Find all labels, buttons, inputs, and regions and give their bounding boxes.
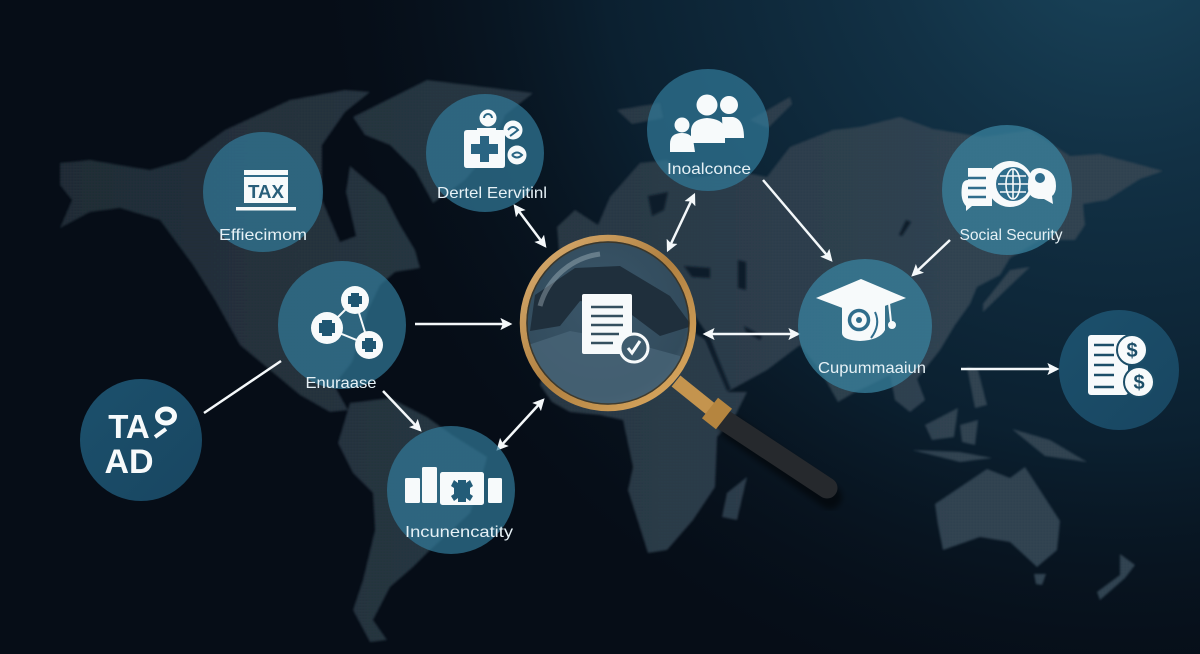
node: Enuraase network bbox=[278, 261, 406, 392]
label: Cupummaaiun bbox=[818, 360, 926, 377]
arrow: Social Security to Cupummaaiun bbox=[913, 240, 950, 275]
icon: document with dollar coins: $ bbox=[1126, 340, 1138, 362]
line: TA AD to Enuraase bbox=[204, 361, 281, 413]
node: dental services bbox=[426, 94, 547, 212]
arrow: Inoalconce to Cupummaaiun bbox=[763, 180, 831, 260]
node: Inoalconce people bbox=[647, 69, 769, 191]
arrow: lens and Cupummaaiun bbox=[705, 333, 798, 335]
icon: medical kit bbox=[464, 110, 526, 168]
icon: people group bbox=[670, 94, 744, 152]
icon: tax calendar: TAX bbox=[248, 182, 284, 202]
label: Social Security bbox=[960, 227, 1062, 244]
icon: TA AD lettering: TA bbox=[108, 408, 150, 445]
world map bbox=[60, 80, 1163, 642]
node: Efficiency tax bbox=[203, 132, 323, 252]
arrow: Dertel Eervitinl and lens bbox=[515, 206, 545, 246]
node: Social Security bbox=[942, 125, 1072, 255]
arrow: Enuraase to lens bbox=[415, 323, 510, 325]
icon: speech bubbles and globe bbox=[962, 161, 1056, 211]
icon: linked medical nodes bbox=[311, 286, 383, 359]
label: Incunencatity bbox=[405, 524, 513, 541]
node: TA AD bbox=[80, 379, 202, 501]
icon: TA AD lettering bbox=[104, 408, 174, 481]
icon: document with dollar coins: $ bbox=[1133, 372, 1145, 394]
node: Incunencatity bbox=[387, 426, 515, 554]
arrow: Enuraase to Incunencatity bbox=[383, 391, 420, 430]
label: Effiecimom bbox=[219, 227, 307, 244]
icon: graduation cap bbox=[816, 279, 906, 341]
node: finance document bbox=[1059, 310, 1179, 430]
icon: document with check bbox=[582, 294, 648, 362]
lens bbox=[523, 238, 693, 408]
arrow: lens and Inoalconce bbox=[668, 195, 694, 250]
arrow: Cupummaaiun to finance bbox=[961, 368, 1057, 370]
arrow: Incunencatity and lens bbox=[498, 400, 543, 449]
connector arrows bbox=[204, 180, 1057, 449]
magnifying glass bbox=[523, 238, 830, 497]
label: Inoalconce bbox=[667, 161, 751, 178]
handle bbox=[676, 381, 830, 497]
label: Dertel Eervitinl bbox=[437, 185, 547, 202]
icon: TA AD lettering: AD bbox=[104, 443, 154, 481]
label: Enuraase bbox=[306, 375, 377, 392]
icon: document with dollar coins bbox=[1088, 335, 1154, 397]
node: Cupummaaiun education bbox=[798, 259, 932, 393]
icon: bars and gear bbox=[405, 467, 502, 505]
